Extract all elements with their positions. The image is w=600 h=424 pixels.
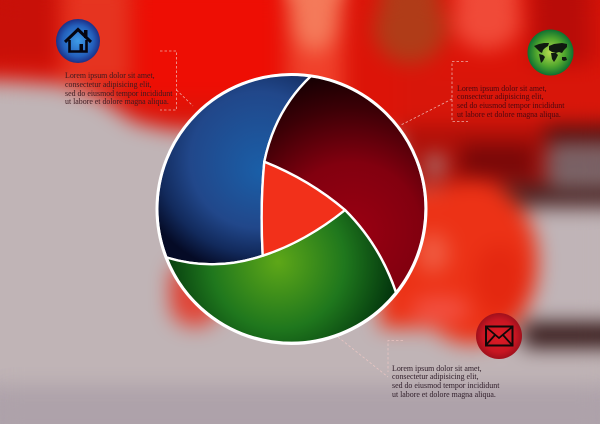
text block: top left [65,71,172,106]
text block: top right: ut labore et dolore magna aliqua. [457,110,561,119]
text block: top left: Lorem ipsum dolor sit amet, [65,71,155,80]
text block: top left: consectetur adipisicing elit, [65,80,152,89]
text block: top right [457,84,564,119]
text block: top right: consectetur adipisicing elit, [457,92,544,101]
text block: bottom right: sed do eiusmod tempor incididunt [392,381,499,390]
circle outline [157,74,426,344]
text block: bottom right: Lorem ipsum dolor sit amet, [392,364,482,372]
segment: green [166,210,396,343]
segment: center triangle [262,162,345,256]
segment: dark red [264,76,426,292]
text block: bottom right: ut labore et dolore magna aliqua. [392,390,496,399]
segment: blue [157,75,311,264]
text block: top left: sed do eiusmod tempor incididunt [65,88,172,98]
icon: world map [528,30,574,76]
icon: home [56,19,100,63]
text block: top right: Lorem ipsum dolor sit amet, [457,84,547,92]
text block: bottom right [392,364,500,399]
connector lines [160,51,468,377]
text block: top right: sed do eiusmod tempor incididunt [457,101,564,110]
text block: bottom right: consectetur adipisicing elit, [392,372,479,381]
icon: envelope [476,313,522,359]
text block: top left: ut labore et dolore magna aliqua. [65,97,169,106]
